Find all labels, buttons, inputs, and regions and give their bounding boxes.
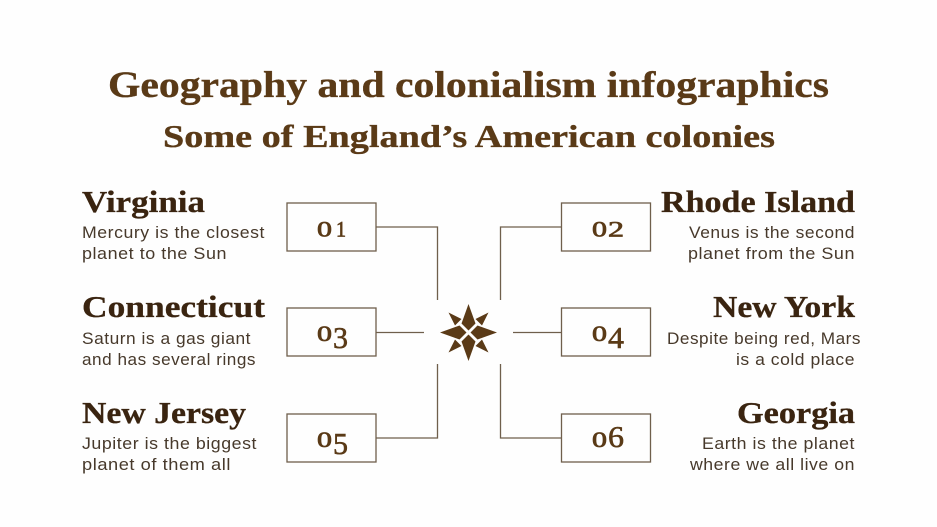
number box 04: [562, 308, 650, 356]
panel: Connecticut: [82, 289, 376, 369]
text: Rhode Island description: Venus is the second: [689, 224, 855, 242]
number box 06: [562, 414, 650, 462]
text: New Jersey description: Jupiter is the biggest: [82, 435, 257, 453]
number box 02: 0: [592, 216, 607, 242]
text: Connecticut description: Saturn is a gas giant: [82, 330, 251, 348]
text: Connecticut description: [82, 330, 256, 369]
number box 03: 3: [333, 320, 348, 355]
panel: New Jersey: [82, 395, 376, 474]
panel: Rhode Island: [562, 184, 855, 263]
text: New York description: Despite being red, Mars: [667, 330, 861, 348]
text: Georgia description: where we all live on: [689, 456, 855, 474]
heading: Rhode Island: Rhode Island: [661, 184, 855, 219]
panel: Georgia: [562, 395, 856, 474]
heading: Virginia: Virginia: [82, 184, 206, 219]
number box 05: [287, 414, 376, 462]
text: New Jersey description: planet of them all: [82, 456, 231, 474]
text: Connecticut description: and has several rings: [82, 351, 256, 369]
number box 03: 0: [317, 321, 332, 346]
text: Virginia description: Mercury is the closest: [82, 224, 265, 242]
panel: New York: [562, 289, 861, 369]
text: Rhode Island description: planet from the Sun: [688, 245, 855, 263]
subtitle: Some of England’s American colonies: [163, 118, 775, 154]
text: Virginia description: [82, 224, 265, 263]
panel: Virginia: [82, 184, 376, 263]
heading: Georgia: Georgia: [737, 395, 856, 430]
number box 06: 6: [608, 419, 624, 454]
number box 03: [287, 308, 376, 356]
heading: Connecticut: Connecticut: [82, 289, 266, 324]
heading: New Jersey: New Jersey: [82, 395, 247, 430]
title: Geography and colonialism infographics: [108, 65, 829, 106]
number box 04: 0: [592, 321, 607, 346]
text: New York description: [667, 330, 861, 369]
text: New Jersey description: [82, 435, 257, 474]
number box 05: 0: [317, 427, 332, 452]
text: Georgia description: [689, 435, 855, 474]
number box 05: 5: [333, 426, 348, 461]
heading: New York: New York: [713, 289, 856, 324]
icon: compass star: [440, 304, 497, 361]
text: Virginia description: planet to the Sun: [82, 245, 227, 263]
connector lines: [376, 227, 561, 438]
number box 06: 0: [592, 427, 607, 452]
text: Georgia description: Earth is the planet: [702, 435, 855, 453]
number box 01: 1: [336, 216, 346, 242]
number box 02: [562, 203, 650, 251]
text: Rhode Island description: [688, 224, 855, 263]
number box 02: 2: [608, 216, 624, 242]
number box 04: 4: [608, 320, 625, 355]
number box 01: [287, 203, 376, 251]
text: New York description: is a cold place: [736, 351, 855, 369]
number box 01: 0: [317, 216, 332, 242]
